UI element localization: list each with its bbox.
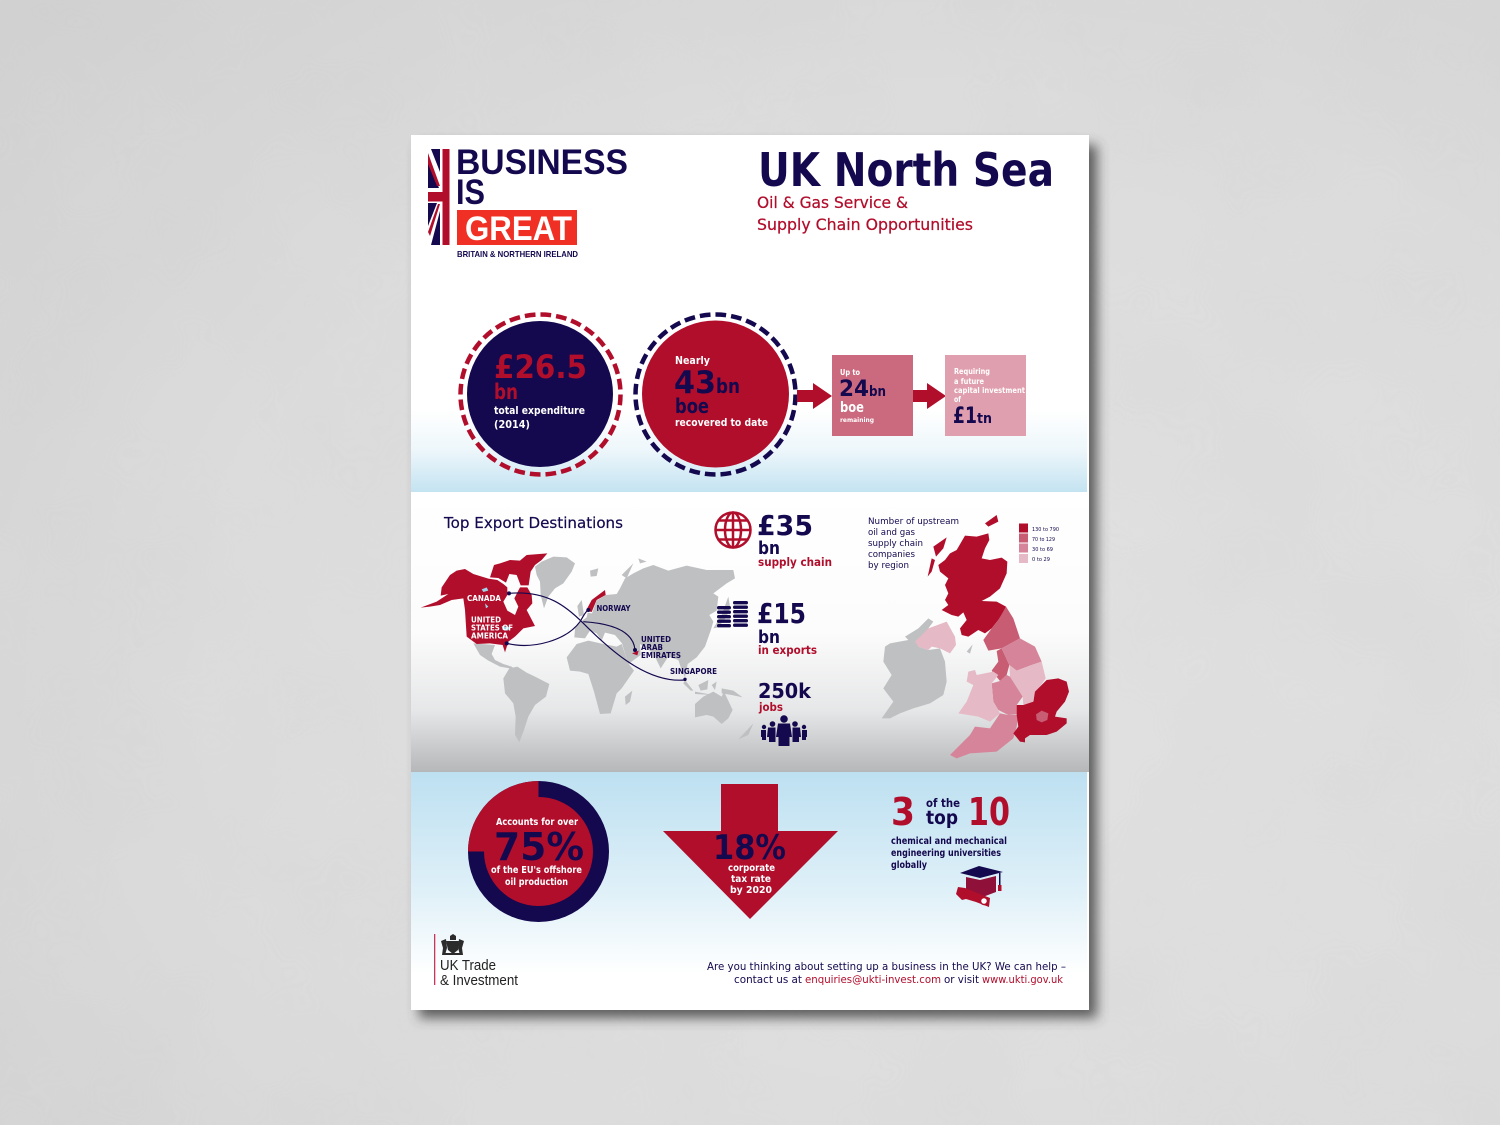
region: Wales [958,670,1000,722]
logo word box: GREAT: GREAT [465,210,572,248]
logo: UK Trade and Investment [434,934,519,989]
stat circle: 43bn boe recovered: Nearly [675,355,710,367]
stat: 3 of the top 10: 3 [891,790,915,834]
UK region text: by region [868,561,909,571]
stat circle: 43bn boe recovered: boe [675,394,709,418]
logo strapline: BRITAIN & NORTHERN IRELAND [457,249,578,259]
arrow: to 24bn box [797,383,832,409]
stat circle: 26.5bn expenditure: £26.5 [494,348,587,386]
map labels: STATES OF [471,624,513,632]
map: red Arctic Canada [490,553,547,585]
donut chart: 75%: Accounts for over [496,817,578,828]
region: Isle of Man [967,644,973,654]
icon: royal crest [441,934,464,955]
map: red Norway [586,590,606,612]
map: red UAE [632,651,639,655]
stat: 250k jobs [758,679,812,714]
box: 1tn capital investment: tn [977,411,992,427]
footer call to action: enquiries@ukti-invest.com [805,974,941,986]
map labels: UNITED [471,616,501,624]
map labels: EMIRATES [641,651,681,660]
map labels: CANADA [467,594,501,603]
poster sheet [411,135,1089,1010]
map labels: ARAB [641,643,663,652]
stat circle: 26.5bn expenditure: bn [494,380,518,404]
legend: UK regions [1019,524,1059,563]
logo word: IS: IS [456,173,485,212]
down arrow: 18% tax: corporate [728,863,775,874]
stat circle: 43bn boe recovered: recovered to date [675,417,768,429]
stat: 35bn supply chain: supply chain [758,555,832,569]
stat: 3 of the top 10: chemical and mechanical [891,836,1007,847]
logo: UK Trade and Investment: & Investment [440,972,519,989]
stat: 3 of the top 10 [891,790,1010,871]
down arrow: 18% tax: tax rate [731,874,771,885]
stat circle: 26.5bn expenditure [460,314,620,474]
stat: 15bn exports: £15 [757,597,806,630]
region: London [1036,711,1048,722]
heading: Top Export Destinations: Top Export Destinations [443,514,623,532]
stat: 3 of the top 10: top [926,807,958,829]
box: 24bn boe remaining: bn [869,384,886,400]
logo word: BUSINESS: BUSINESS [456,143,628,182]
region: South West [950,713,1018,758]
stat: 3 of the top 10: globally [891,860,928,871]
stat: 3 of the top 10: engineering universities [891,848,1001,859]
footer call to action: Are you thinking about setting up a business in the UK? We can help – [707,961,1066,973]
footer call to action: www.ukti.gov.uk [982,974,1064,986]
stat: 250k jobs: jobs [758,700,783,714]
stat circle: 43bn boe recovered: 43 [674,365,716,401]
footer call to action [707,961,1066,986]
box: 24bn boe remaining [832,355,913,436]
stat circle: 26.5bn expenditure: (2014) [494,419,530,431]
region: North West [992,648,1009,681]
box: 24bn boe remaining: boe [840,400,864,416]
title: UK North Sea [758,143,1054,197]
map labels: AMERICA [471,632,508,640]
UK region text [868,517,959,571]
stat: 3 of the top 10: of the [926,796,960,810]
UK region text: oil and gas [868,528,915,538]
world map [421,553,753,742]
icon: coins [717,601,748,627]
region: South East and East [1013,678,1069,742]
stat: 3 of the top 10: 10 [968,790,1010,834]
box: 1tn capital investment: of [954,395,962,404]
region: Yorkshire [1002,638,1042,671]
region: Northern Ireland [915,622,956,653]
stat circle: 43bn boe recovered [636,314,796,474]
icon: people [761,715,807,746]
down arrow: 18% tax [663,784,838,919]
region: North East [983,607,1020,651]
donut chart: 75% [468,781,609,922]
region: East Midlands [1009,662,1046,705]
map labels [467,594,717,676]
subtitle [757,193,973,234]
icon: graduation cap and scroll [956,866,1003,907]
down arrow: 18% tax: by 2020 [730,885,772,896]
box: 1tn capital investment: £1 [953,404,977,429]
region: West Midlands [992,675,1023,715]
UK regions map [882,515,1069,758]
map: grey continents [473,557,753,742]
box: 1tn capital investment [945,355,1026,436]
map labels: NORWAY [596,604,631,613]
donut chart: 75%: oil production [505,877,568,888]
logo: Business is Great [428,143,628,259]
stat circle: 26.5bn expenditure: total expenditure [494,405,585,417]
logo: UK Trade and Investment: UK Trade [440,957,496,974]
UK region text: supply chain [868,539,923,549]
subtitle: Supply Chain Opportunities [757,215,973,234]
stat: 15bn exports: bn [758,627,780,648]
drop shadow of poster [419,145,1097,1018]
stat circle: 43bn boe recovered: bn [716,374,740,398]
map: lakes [482,587,512,631]
map: trade route curves [507,593,685,680]
stat: 15bn exports [757,597,817,657]
footer call to action: or visit [944,974,979,986]
stat: 35bn supply chain [757,509,832,569]
region: Scotland [928,515,1007,637]
UK region text: Number of upstream [868,517,959,527]
box: 24bn boe remaining: Up to [840,368,860,377]
box: 1tn capital investment: a future [954,377,984,386]
legend: UK regions: 130 to 790 [1032,527,1059,533]
icon: globe [716,512,750,548]
map labels: SINGAPORE [670,667,717,676]
arrow: to 1tn box [913,383,946,409]
box: 1tn capital investment: Requiring [954,367,990,376]
stat: 35bn supply chain: bn [758,538,780,559]
UK region text: companies [868,550,915,560]
map: route end dots [505,591,687,681]
map: red North America [421,569,535,652]
box: 24bn boe remaining: 24 [839,377,869,402]
box: 24bn boe remaining: remaining [840,416,874,424]
legend: UK regions: 0 to 29 [1032,557,1050,563]
stat: 35bn supply chain: £35 [757,509,813,542]
subtitle: Oil & Gas Service & [757,193,908,212]
legend: UK regions: 30 to 69 [1032,547,1053,553]
icon: union flag strip [428,149,450,245]
box: 1tn capital investment: capital investment [954,386,1025,395]
legend: UK regions: 70 to 129 [1032,537,1055,543]
donut chart: 75%: 75% [494,825,584,869]
stat: 15bn exports: in exports [758,643,817,657]
region: Ireland [882,618,947,718]
footer call to action: contact us at [734,974,802,986]
stat: 250k jobs: 250k [758,679,812,703]
donut chart: 75%: of the EU's offshore [491,865,582,876]
map labels: UNITED [641,635,671,644]
down arrow: 18% tax: 18% [713,828,786,868]
